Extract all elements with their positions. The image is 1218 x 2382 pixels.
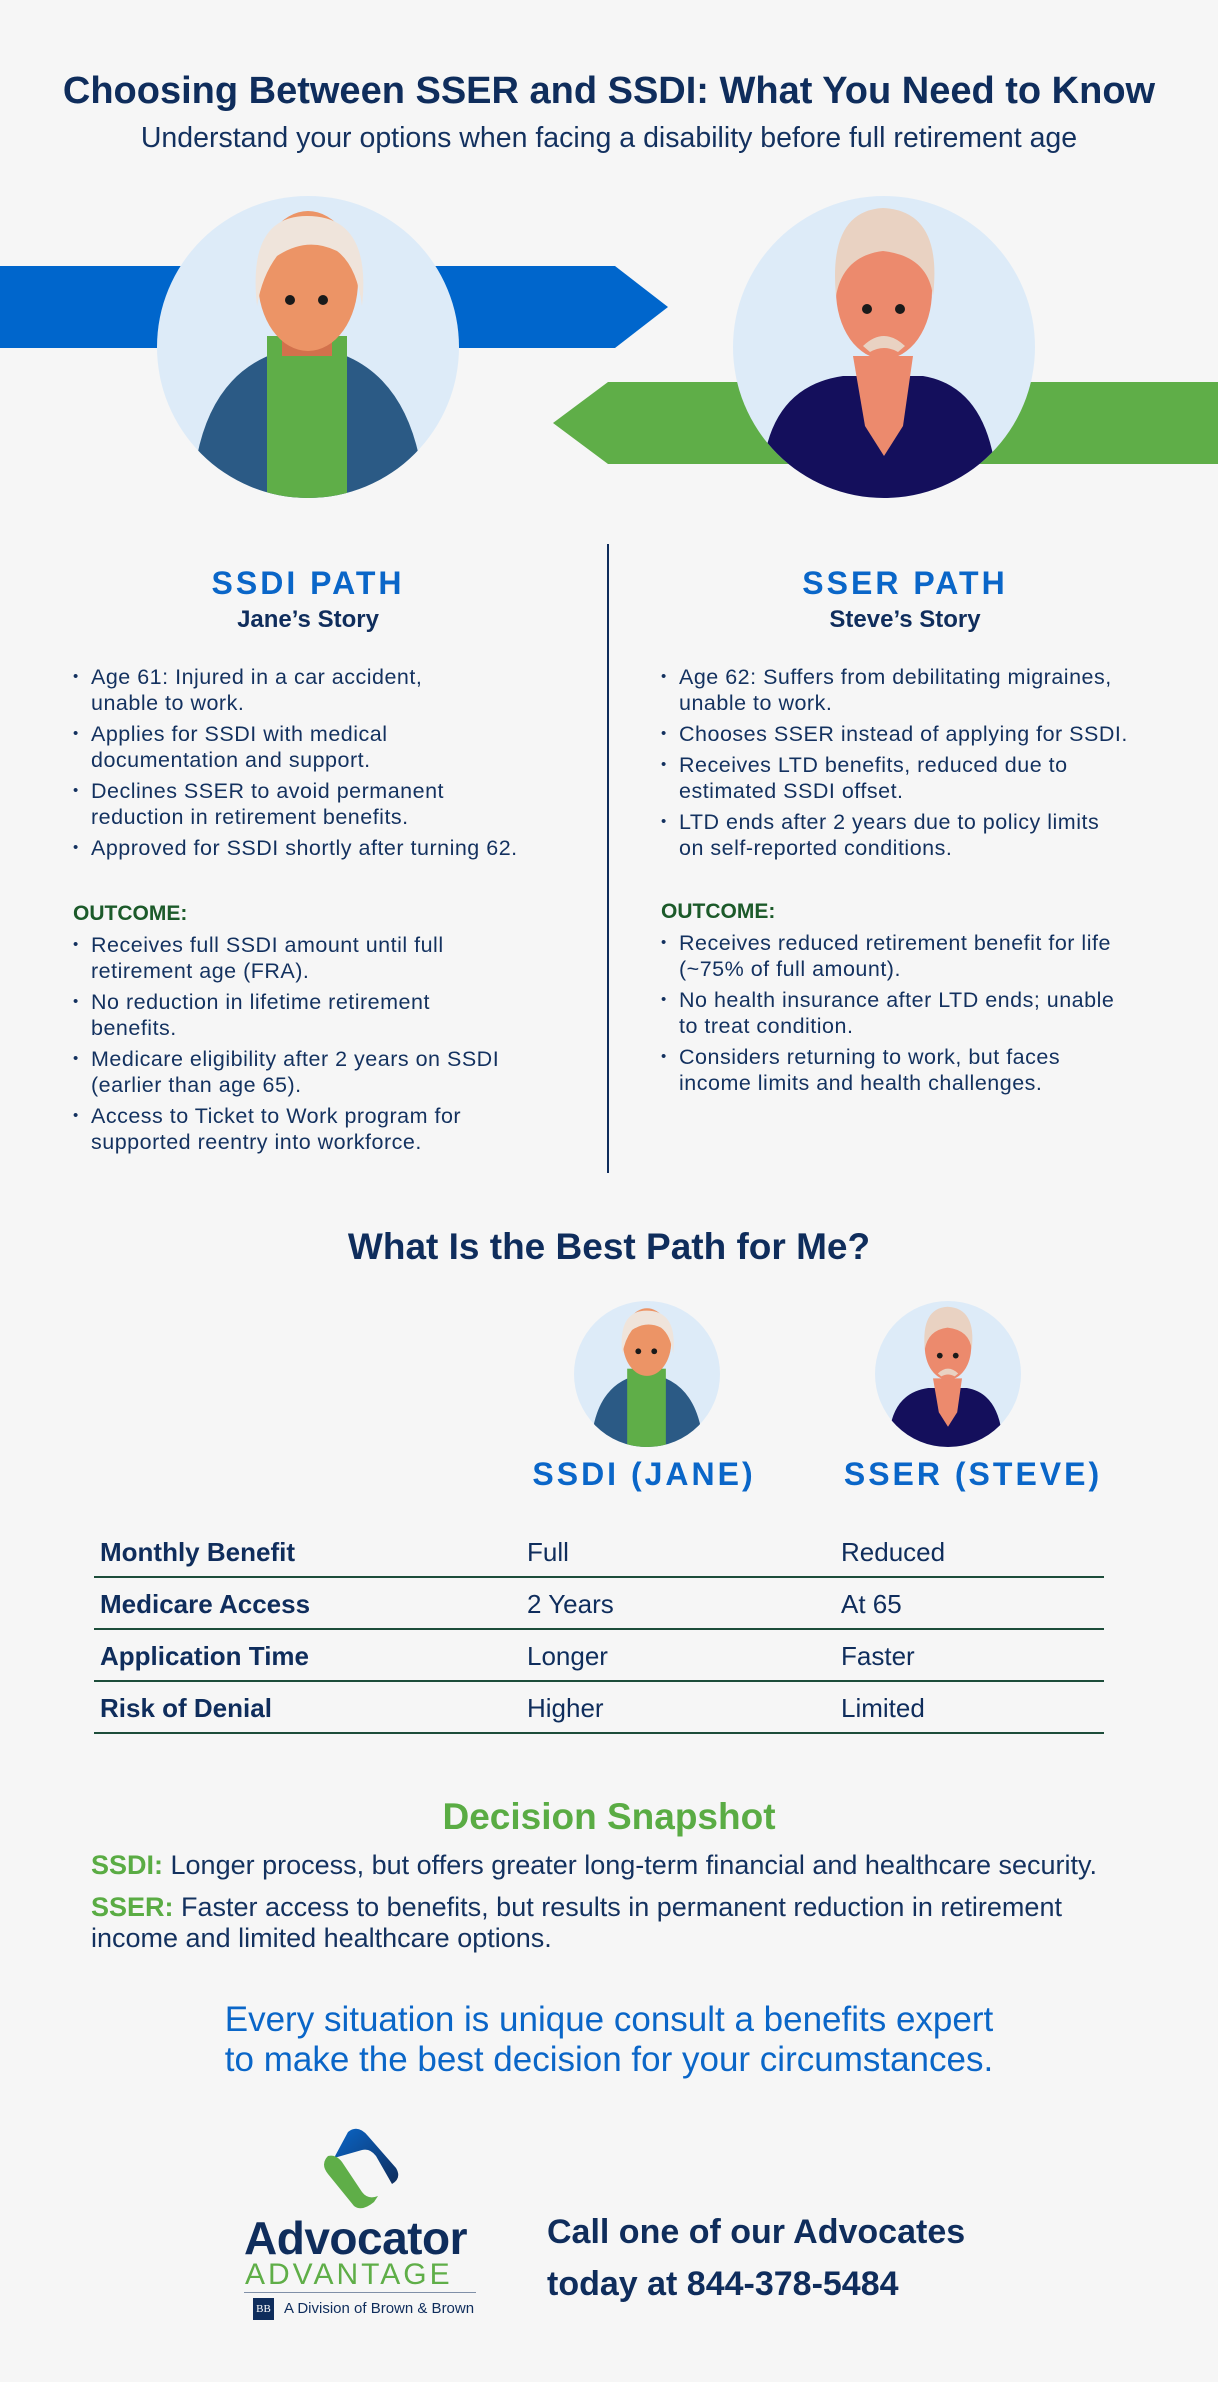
contact text bbox=[547, 2213, 965, 2303]
story bullets: unable to work. bbox=[91, 691, 244, 715]
outcome heading: OUTCOME: bbox=[73, 902, 187, 925]
small avatar: Steve bbox=[875, 1301, 1021, 1447]
logo: BB bbox=[256, 2303, 271, 2315]
comparison table: Limited bbox=[841, 1693, 925, 1723]
small avatar: Jane bbox=[574, 1301, 720, 1447]
logo bbox=[244, 2128, 476, 2320]
title: Choosing Between SSER and SSDI: What You Need to Know bbox=[63, 70, 1155, 112]
outcome bullets: Considers returning to work, but faces bbox=[679, 1045, 1060, 1069]
story bullets: Age 61: Injured in a car accident, bbox=[91, 665, 422, 689]
heading: SSDI PATH: SSDI PATH bbox=[212, 565, 404, 601]
divider bbox=[607, 544, 609, 1173]
logo: ADVANTAGE bbox=[245, 2258, 453, 2291]
comparison table: Higher bbox=[527, 1693, 604, 1723]
comparison table: Faster bbox=[841, 1641, 915, 1671]
outcome bullets: Access to Ticket to Work program for bbox=[91, 1104, 461, 1128]
comparison table: Reduced bbox=[841, 1537, 945, 1567]
panel: SSDI path bbox=[73, 565, 518, 1154]
story bullets: LTD ends after 2 years due to policy limits bbox=[679, 810, 1099, 834]
outcome bullets: income limits and health challenges. bbox=[679, 1071, 1042, 1095]
outcome bullets bbox=[74, 933, 499, 1154]
green arrow bbox=[553, 382, 1218, 464]
story bullets: unable to work. bbox=[679, 691, 832, 715]
comparison table: At 65 bbox=[841, 1589, 902, 1619]
outcome bullets: No reduction in lifetime retirement bbox=[91, 990, 430, 1014]
outcome heading: OUTCOME: bbox=[661, 900, 775, 923]
story bullets: Receives LTD benefits, reduced due to bbox=[679, 753, 1068, 777]
avatar: Jane bbox=[157, 196, 459, 498]
story bullets: Declines SSER to avoid permanent bbox=[91, 779, 444, 803]
story bullets: reduction in retirement benefits. bbox=[91, 805, 409, 829]
snapshot text bbox=[91, 1850, 1097, 1953]
story bullets: estimated SSDI offset. bbox=[679, 779, 904, 803]
snapshot text: SSDI: Longer process, but offers greater long-term financial and healthcare security. bbox=[91, 1850, 1097, 1880]
comparison table bbox=[94, 1537, 1104, 1734]
logo: A Division of Brown & Brown bbox=[284, 2300, 474, 2317]
story bullets: Age 62: Suffers from debilitating migraines, bbox=[679, 665, 1112, 689]
wordmark: Advocator bbox=[244, 2212, 467, 2264]
outcome bullets: retirement age (FRA). bbox=[91, 959, 309, 983]
icon: logo mark bbox=[324, 2128, 398, 2208]
avatar: Steve bbox=[733, 196, 1035, 498]
comparison table: Application Time bbox=[100, 1641, 309, 1671]
outcome bullets: No health insurance after LTD ends; unable bbox=[679, 988, 1114, 1012]
comparison table: 2 Years bbox=[527, 1589, 614, 1619]
heading: SSER PATH: SSER PATH bbox=[802, 565, 1008, 601]
panel: SSER path bbox=[661, 565, 1128, 1095]
snapshot text: income and limited healthcare options. bbox=[91, 1923, 552, 1953]
outcome bullets: to treat condition. bbox=[679, 1014, 853, 1038]
subheading: Steve’s Story bbox=[829, 606, 981, 633]
comparison table: Risk of Denial bbox=[100, 1693, 272, 1723]
blue arrow bbox=[0, 266, 668, 348]
outcome bullets: Medicare eligibility after 2 years on SSDI bbox=[91, 1047, 499, 1071]
outcome bullets: (earlier than age 65). bbox=[91, 1073, 302, 1097]
snapshot text: SSER: Faster access to benefits, but results in permanent reduction in retirement bbox=[91, 1892, 1062, 1922]
story bullets bbox=[662, 665, 1128, 860]
contact text: today at 844-378-5484 bbox=[547, 2265, 899, 2303]
subtitle: Understand your options when facing a disability before full retirement age bbox=[141, 122, 1077, 154]
call to action bbox=[225, 2000, 993, 2079]
subheading: Jane’s Story bbox=[237, 606, 379, 633]
comparison table: Longer bbox=[527, 1641, 608, 1671]
column header: SSDI (JANE): SSDI (JANE) bbox=[532, 1456, 756, 1492]
story bullets: Chooses SSER instead of applying for SSDI. bbox=[679, 722, 1128, 746]
outcome bullets: Receives reduced retirement benefit for life bbox=[679, 931, 1111, 955]
heading: decision snapshot: Decision Snapshot bbox=[442, 1796, 776, 1837]
comparison table: Full bbox=[527, 1537, 569, 1567]
outcome bullets: (~75% of full amount). bbox=[679, 957, 901, 981]
comparison table: Monthly Benefit bbox=[100, 1537, 295, 1567]
outcome bullets: benefits. bbox=[91, 1016, 177, 1040]
column header: SSER (STEVE): SSER (STEVE) bbox=[844, 1456, 1102, 1492]
heading: best path: What Is the Best Path for Me? bbox=[348, 1226, 870, 1267]
comparison table: Medicare Access bbox=[100, 1589, 310, 1619]
call to action: to make the best decision for your circumstances. bbox=[225, 2040, 993, 2079]
outcome bullets bbox=[662, 931, 1114, 1095]
story bullets: Approved for SSDI shortly after turning 62. bbox=[91, 836, 518, 860]
story bullets: Applies for SSDI with medical bbox=[91, 722, 388, 746]
story bullets: documentation and support. bbox=[91, 748, 371, 772]
call to action: Every situation is unique consult a benefits expert bbox=[225, 2000, 993, 2039]
outcome bullets: Receives full SSDI amount until full bbox=[91, 933, 444, 957]
story bullets bbox=[74, 665, 518, 860]
outcome bullets: supported reentry into workforce. bbox=[91, 1130, 422, 1154]
contact text: Call one of our Advocates bbox=[547, 2213, 965, 2251]
story bullets: on self-reported conditions. bbox=[679, 836, 952, 860]
